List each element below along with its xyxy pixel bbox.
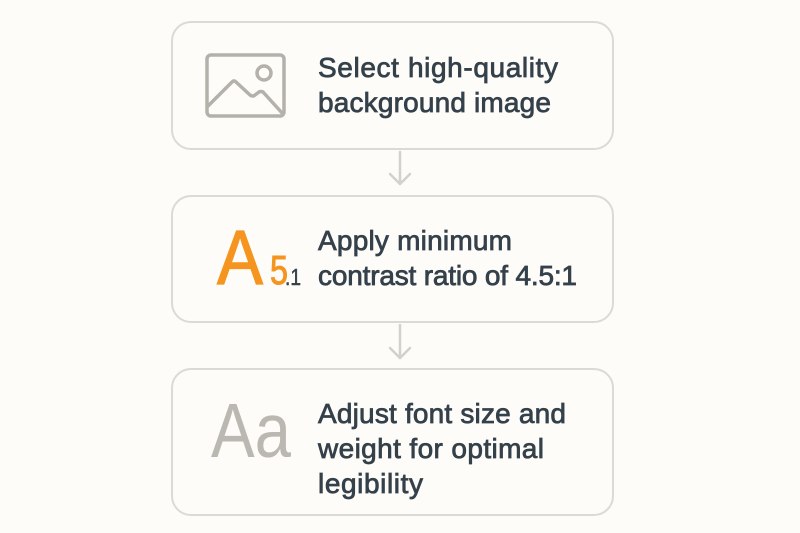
text: step 1: Select high-quality	[318, 52, 558, 83]
panel: step 1 card	[170, 21, 614, 150]
icon: contrast ratio A 5.1: 5	[270, 247, 288, 293]
text: step 2: contrast ratio of 4.5:1	[318, 260, 577, 291]
icon: contrast ratio A 5.1: A	[217, 215, 264, 301]
icon: contrast ratio A 5.1: .1	[285, 264, 301, 290]
text: step 3: weight for optimal	[317, 433, 544, 464]
panel: step 3 card	[170, 368, 614, 516]
text: step 3: legibility	[318, 468, 423, 499]
text: step 2: Apply minimum	[318, 225, 512, 256]
icon: Aa font sample: Aa	[211, 388, 291, 474]
panel: step 2 card	[170, 195, 614, 323]
text: step 3: Adjust font size and	[318, 398, 566, 429]
text: step 1: background image	[318, 87, 551, 118]
